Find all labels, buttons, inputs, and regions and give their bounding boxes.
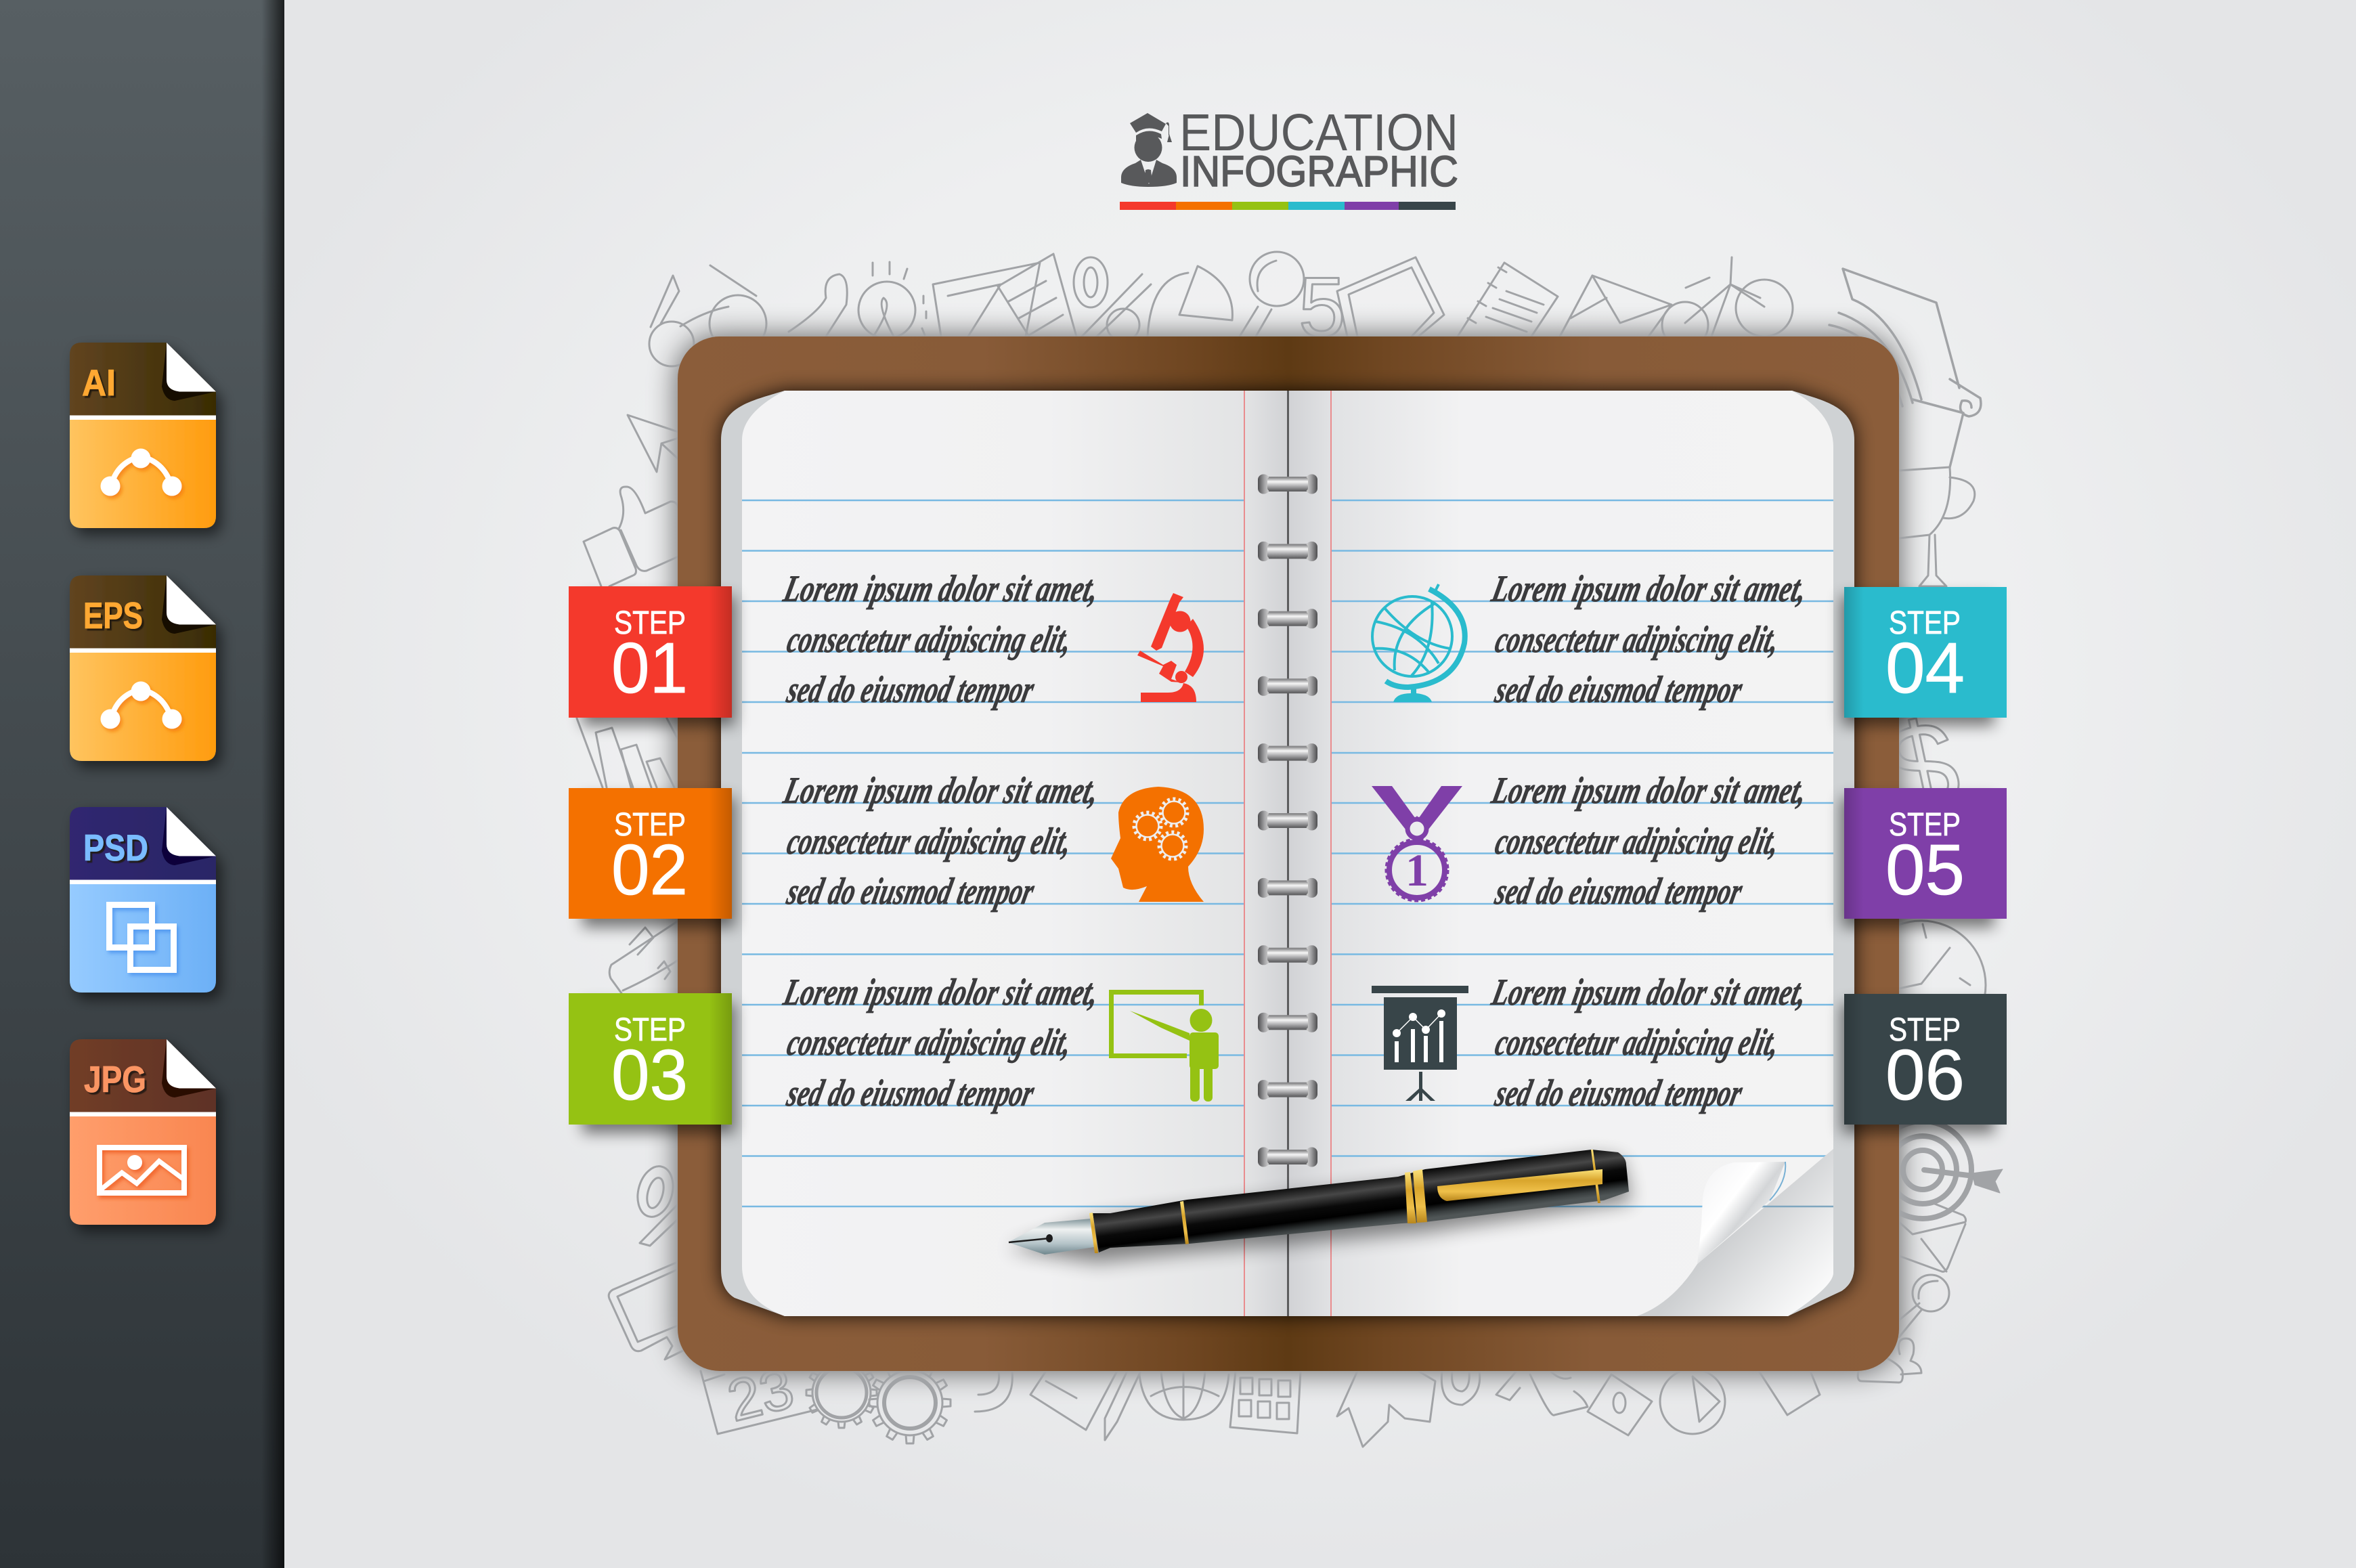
doodle: bar chart — [577, 718, 678, 787]
doodle: calculator — [1230, 1371, 1301, 1433]
doodle: pie lower right — [1660, 1369, 1725, 1434]
icon: JPG file badge: JPG — [84, 1058, 146, 1100]
doodle: graduation cap — [1829, 269, 1981, 467]
text block: step 01: Lorem ipsum dolor sit amet, — [779, 568, 1103, 610]
doodle: gear large — [869, 1362, 951, 1443]
doodle: number five: 5 — [1299, 261, 1346, 355]
text block: step 01 — [779, 568, 1103, 711]
doodle: dollar and tools — [1441, 1371, 1588, 1415]
ruled lines right — [1331, 500, 1833, 1206]
doodle: trophy — [1899, 467, 1975, 586]
text block: step 01: sed do eiusmod tempor — [783, 669, 1039, 711]
text block: step 05: Lorem ipsum dolor sit amet, — [1487, 770, 1811, 812]
tab: step 06: STEP — [1889, 1012, 1961, 1048]
spiral rings — [1258, 474, 1317, 1167]
doodle: bicycle — [1736, 280, 1793, 336]
doodle: briefcase — [609, 921, 678, 993]
page stack — [721, 391, 1854, 1316]
icon: AI file badge — [70, 343, 216, 528]
doodle: person — [1858, 1338, 1921, 1382]
text block: step 03: consectetur adipiscing elit, — [783, 1022, 1076, 1064]
title: Education Infographic — [1120, 104, 1458, 210]
icon: JPG file badge — [70, 1039, 216, 1225]
icon: globe — [1372, 584, 1465, 702]
icon: AI file badge: AI — [82, 362, 116, 404]
gold bands — [1089, 1150, 1600, 1253]
doodle: bulb and hand — [789, 262, 926, 336]
doodle: thumbs up — [584, 487, 678, 586]
tab: step 06: 06 — [1885, 1035, 1965, 1115]
doodle: target with arrow — [1874, 1121, 2003, 1219]
tab: step 02: 02 — [611, 830, 688, 910]
text block: step 04: consectetur adipiscing elit, — [1491, 619, 1783, 661]
leather cover — [678, 336, 1899, 1371]
cover shadow — [678, 336, 1899, 1371]
text block: step 04: Lorem ipsum dolor sit amet, — [1487, 568, 1811, 610]
doodle: magnifier right — [1913, 1275, 1949, 1311]
doodle: set square — [933, 263, 1040, 336]
tab shadows — [582, 596, 1994, 1133]
text block: step 03: sed do eiusmod tempor — [783, 1072, 1039, 1114]
icon: graduate — [1121, 113, 1177, 187]
pen — [1008, 1150, 1629, 1255]
page stack shadow — [721, 391, 1854, 1316]
pen shadow — [1008, 1156, 1632, 1263]
tab: step 02: STEP — [614, 807, 686, 843]
tab: step 05: STEP — [1889, 807, 1961, 843]
text block: step 02 — [779, 770, 1103, 913]
icon: presentation board — [1372, 986, 1468, 1101]
open pages — [742, 391, 1833, 1316]
ruled lines left — [742, 500, 1244, 1206]
pen clip — [1437, 1169, 1602, 1201]
tab: step 04: STEP — [1889, 605, 1961, 641]
doodle: spiral notebook — [1458, 263, 1558, 336]
barrel — [1093, 1150, 1629, 1253]
text block: step 05 — [1487, 770, 1811, 913]
colour bar — [1120, 202, 1456, 210]
icon: teacher at board — [1109, 990, 1219, 1102]
doodle: paper plane — [628, 415, 678, 472]
tab: step 02 — [569, 788, 732, 919]
doodle: envelope — [1560, 276, 1672, 336]
tab: step 03 — [569, 993, 732, 1125]
nib — [1008, 1219, 1094, 1255]
tab: step 03: STEP — [614, 1012, 686, 1048]
text block: step 05: consectetur adipiscing elit, — [1491, 821, 1783, 863]
doodle icons behind notebook: 23 — [721, 1355, 800, 1434]
doodle: gear small — [806, 1357, 877, 1428]
text block: step 02: Lorem ipsum dolor sit amet, — [779, 770, 1103, 812]
doodle: magnifying glass — [1250, 252, 1304, 306]
doodle: number nine — [975, 1371, 1012, 1412]
text block: step 04: sed do eiusmod tempor — [1491, 669, 1747, 711]
icon: head with gears — [1111, 787, 1204, 902]
margin lines and spine — [1244, 391, 1331, 1316]
tab: step 01: 01 — [611, 628, 688, 708]
text block: step 06 — [1487, 972, 1811, 1114]
doodle: hand cursor — [1337, 1371, 1435, 1447]
doodle: clock — [1857, 921, 1986, 1049]
tab: step 05 — [1844, 788, 2007, 919]
tab: step 04: 04 — [1885, 628, 1965, 708]
doodle: dollar sign: $ — [1874, 693, 1971, 844]
text block: step 05: sed do eiusmod tempor — [1491, 871, 1747, 913]
text block: step 04 — [1487, 568, 1811, 711]
doodle: tablet — [1337, 257, 1444, 336]
icon: EPS file badge: EPS — [83, 594, 143, 636]
text block: step 06: sed do eiusmod tempor — [1491, 1072, 1747, 1114]
notebook — [678, 336, 1899, 1371]
doodle: calendar — [701, 1371, 817, 1434]
doodle: lock — [1588, 1374, 1652, 1435]
doodle: glasses — [651, 265, 756, 327]
heading: INFOGRAPHIC: INFOGRAPHIC — [1180, 147, 1458, 196]
heading: EDUCATION: EDUCATION — [1179, 104, 1458, 162]
tab: step 06 — [1844, 994, 2007, 1125]
icon: PSD file badge — [70, 807, 216, 993]
tab: step 01 — [569, 586, 732, 718]
text block: step 06: consectetur adipiscing elit, — [1491, 1022, 1783, 1064]
doodle: ruler and pencil — [1030, 1371, 1141, 1440]
text block: step 06: Lorem ipsum dolor sit amet, — [1487, 972, 1811, 1014]
doodle: box — [1759, 1371, 1820, 1415]
doodle: monitor — [609, 1262, 687, 1359]
text block: step 01: consectetur adipiscing elit, — [783, 619, 1076, 661]
doodle: percent sign — [1074, 257, 1108, 307]
icon: PSD file badge: PSD — [83, 827, 148, 869]
doodle: notepad — [998, 254, 1076, 336]
icon: medal — [1372, 786, 1462, 901]
text block: step 02: consectetur adipiscing elit, — [783, 821, 1076, 863]
doodle icons behind notebook — [577, 252, 2003, 1447]
doodle: envelope right — [1899, 1202, 1966, 1271]
icon: microscope — [1137, 593, 1204, 702]
doodle: percent lower left — [632, 1162, 678, 1221]
doodle: pie chart — [1148, 266, 1232, 336]
tab: step 01: STEP — [614, 605, 686, 641]
text block: step 02: sed do eiusmod tempor — [783, 871, 1039, 913]
page curl — [1637, 1149, 1833, 1316]
text block: step 03: Lorem ipsum dolor sit amet, — [779, 972, 1103, 1014]
panel: dark sidebar — [0, 0, 284, 1568]
doodle: globe — [1139, 1371, 1229, 1420]
tab: step 05: 05 — [1885, 830, 1965, 910]
icon: EPS file badge — [70, 575, 216, 761]
icon: medal: 1 — [1405, 844, 1428, 896]
tab: step 04 — [1844, 587, 2007, 718]
text block: step 03 — [779, 972, 1103, 1114]
tab: step 03: 03 — [611, 1035, 688, 1115]
